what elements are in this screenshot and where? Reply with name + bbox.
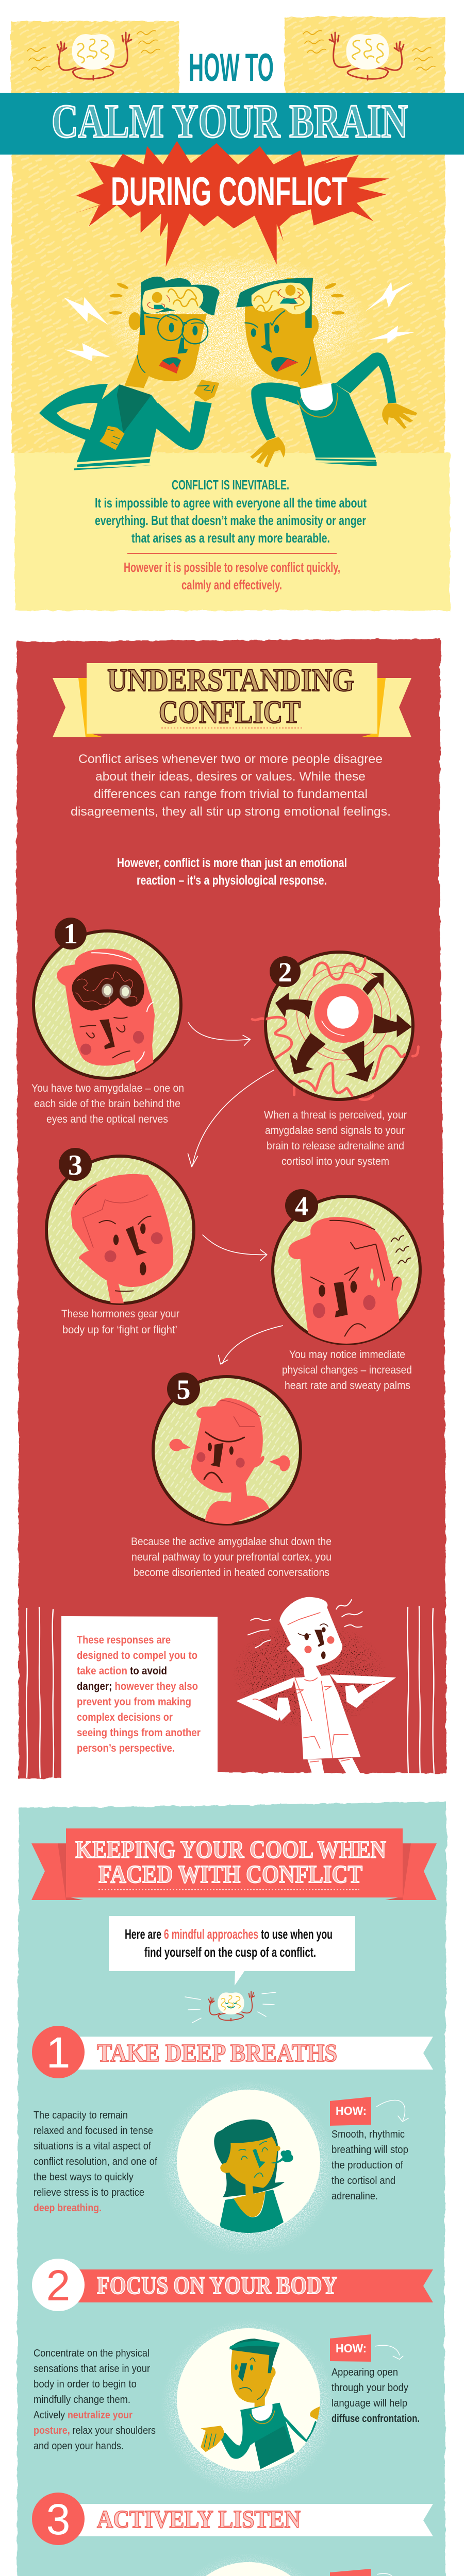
banner: ACTIVELY LISTEN [97, 2505, 301, 2533]
text: physiological response: reaction – it’s a physiological response. [137, 873, 327, 888]
decorative wavy curtain lines [26, 1606, 434, 1777]
text: step 1 left: conflict resolution, and one of [34, 2156, 157, 2167]
text: step 1 how [332, 2128, 408, 2202]
text: resolve conflict quickly [124, 560, 340, 592]
title: how to: HOW TO [189, 46, 274, 90]
text: conflict arises: differences can range from trivial to fundamental [94, 787, 368, 801]
text: step 1 caption: You have two amygdalae – one on [31, 1082, 184, 1094]
illustration: man with open posture [177, 2328, 321, 2471]
callout: these responses: These responses are [77, 1634, 171, 1646]
text: step 2 how: diffuse confrontation. [332, 2413, 420, 2425]
text: step 1 left: the best ways to quickly [34, 2171, 134, 2183]
text: physiological response [117, 856, 347, 888]
text: resolve conflict quickly: However it is possible to resolve conflict quickly, [124, 560, 340, 575]
text: step 5 caption: become disoriented in heated conversations [134, 1567, 329, 1579]
how label with arrow: HOW: [336, 2104, 367, 2117]
text: step 2 caption: cortisol into your system [281, 1156, 389, 1167]
panel: main yellow background [12, 154, 445, 453]
text: step 4 caption: physical changes – increased [282, 1364, 412, 1376]
callout: these responses: prevent you from making [77, 1696, 191, 1708]
starburst [74, 141, 389, 267]
banner: FOCUS ON YOUR BODY [97, 2271, 337, 2299]
panel: understanding conflict [16, 639, 446, 1784]
panel: keeping your cool [15, 1802, 454, 2576]
step 5: steaming head [153, 1372, 301, 1525]
icon: meditating brain left [27, 31, 160, 80]
callout: these responses: complex decisions or [77, 1711, 173, 1723]
icon: small smiling brain [185, 1991, 276, 2023]
callout: these responses: take action to avoid [77, 1665, 167, 1677]
callout: six mindful approaches: find yourself on the cusp of a conflict. [144, 1944, 316, 1960]
step 4: physical changes head: 4 [295, 1192, 308, 1221]
how label with arrow [330, 2097, 408, 2126]
title band [0, 93, 464, 155]
ribbon: keeping your cool: FACED WITH CONFLICT [98, 1860, 362, 1888]
text: step 2 caption: brain to release adrenaline and [267, 1140, 404, 1152]
icon: alarm droplets [109, 282, 344, 315]
text: step 2 how: through your body [332, 2382, 409, 2394]
step 2: amygdalae signal [252, 952, 418, 1100]
callout: these responses: person’s perspective. [77, 1742, 175, 1754]
text: conflict is inevitable: everything. But that doesn’t make the animosity or anger [95, 513, 366, 528]
text: step 1 caption [31, 1082, 184, 1125]
text: step 1 left [34, 2109, 157, 2214]
text: step 1 how: adrenaline. [332, 2190, 378, 2202]
banner: 3 [46, 2495, 70, 2544]
arrow: step 3 to 4 [203, 1235, 267, 1261]
text: step 2 left: posture, relax your shoulders [34, 2425, 156, 2436]
text: step 3 caption [61, 1308, 179, 1336]
callout: these responses: seeing things from another [77, 1727, 201, 1739]
arrow: step 4 to 5 [219, 1326, 283, 1364]
illustration: woman breathing [177, 2090, 320, 2233]
text: step 1 how: the cortisol and [332, 2175, 395, 2187]
text: step 2 left: body in order to begin to [34, 2378, 137, 2390]
icon: lightning bolts [64, 282, 415, 361]
step 1: head with brain [34, 918, 181, 1078]
callout: these responses: designed to compel you to [77, 1650, 197, 1662]
step 1: take deep breaths [32, 2026, 433, 2255]
text: step 1 left: deep breathing. [34, 2202, 102, 2214]
step 2: focus on your body [32, 2259, 433, 2471]
how label with arrow: HOW: [336, 2342, 367, 2355]
illustration: man listening with speech bubbles [206, 2562, 291, 2576]
text: conflict is inevitable: It is impossible to agree with everyone all the time about [95, 495, 367, 511]
ribbon: understanding conflict [53, 663, 411, 737]
divider rule [127, 553, 337, 554]
mint panel background [15, 1802, 454, 2576]
step 3: hormones head: 3 [68, 1149, 82, 1181]
banner [32, 2259, 433, 2311]
text: step 2 left: Concentrate on the physical [34, 2347, 150, 2359]
text: step 2 caption [264, 1109, 407, 1167]
speckle behind step illustrations [155, 2080, 336, 2576]
text: step 3 caption: These hormones gear your [61, 1308, 179, 1320]
text: step 1 left: relaxed and focused in tense [34, 2125, 153, 2137]
step 2: amygdalae signal: 2 [278, 957, 292, 988]
text: physiological response: However, conflict is more than just an emotional [117, 856, 347, 870]
text: step 2 left [34, 2347, 156, 2452]
text: step 5 caption: neural pathway to your prefrontal cortex, you [131, 1551, 332, 1563]
ribbon: keeping your cool: KEEPING YOUR COOL WHEN [75, 1835, 386, 1863]
panel background red [16, 639, 446, 1778]
banner: 1 [46, 2028, 70, 2077]
ribbon: understanding conflict: UNDERSTANDING [107, 663, 354, 698]
text: step 4 caption: You may notice immediate [289, 1349, 405, 1361]
text: conflict is inevitable [95, 477, 367, 546]
text: step 3 caption: body up for ‘fight or flight’ [62, 1324, 177, 1336]
illustration: two arguing men [39, 277, 418, 470]
arrow: step 1 to 2 [189, 1023, 250, 1045]
banner [32, 2026, 433, 2078]
text: step 5 caption: Because the active amygdalae shut down the [131, 1536, 332, 1548]
text: step 2 left: sensations that arise in your [34, 2363, 150, 2375]
text: step 1 how: the production of [332, 2159, 403, 2171]
text: step 1 how: breathing will stop [332, 2144, 408, 2156]
callout: these responses: danger; however they also [77, 1681, 198, 1692]
figure: stressed man in white [236, 1597, 396, 1774]
text: step 2 how: Appearing open [332, 2366, 398, 2378]
banner: 2 [46, 2261, 70, 2310]
text: conflict arises [71, 752, 391, 819]
callout: these responses [61, 1616, 218, 1784]
text: step 1 left: situations is a vital aspect of [34, 2140, 151, 2152]
dark speckle behind white figure [232, 1620, 387, 1728]
step 4: physical changes head [273, 1189, 420, 1349]
figure: right man [236, 278, 418, 467]
banner: TAKE DEEP BREATHS [97, 2039, 337, 2067]
panel: header section [0, 17, 464, 611]
text: step 4 caption [282, 1349, 412, 1392]
text: step 2 left: Actively neutralize your [34, 2409, 132, 2421]
how label with arrow [330, 2569, 400, 2576]
text: resolve conflict quickly: calmly and effectively. [181, 577, 282, 592]
step 3: hormones head [46, 1148, 194, 1305]
text: conflict arises: about their ideas, desires or values. While these [95, 770, 366, 784]
text: conflict arises: Conflict arises whenever two or more people disagree [78, 752, 383, 766]
text: step 2 how: language will help [332, 2397, 407, 2409]
step 5: steaming head: 5 [176, 1374, 191, 1405]
step 3: actively listen [32, 2493, 433, 2576]
ribbon: understanding conflict: CONFLICT [159, 695, 301, 730]
text: step 1 caption: each side of the brain behind the [34, 1098, 180, 1110]
icon: meditating brain right [303, 31, 435, 80]
banner [32, 2493, 433, 2545]
text: step 2 left: and open your hands. [34, 2440, 124, 2452]
figure: left man [39, 277, 220, 470]
text: step 2 how [332, 2366, 420, 2425]
arrow: step 2 to 3 [188, 1070, 274, 1167]
how label with arrow [330, 2334, 403, 2362]
step 1: head with brain: 1 [63, 918, 78, 950]
ribbon: keeping your cool [31, 1828, 437, 1900]
text: step 1 how: Smooth, rhythmic [332, 2128, 405, 2140]
callout: six mindful approaches [109, 1916, 355, 1986]
panel: pale yellow lower panel [15, 453, 450, 611]
callout: six mindful approaches: Here are 6 mindful approaches to use when you [125, 1926, 333, 1942]
text: step 2 caption: When a threat is perceived, your [264, 1109, 407, 1121]
text: step 1 left: relieve stress is to practice [34, 2187, 144, 2198]
text: step 1 caption: eyes and the optical nerves [46, 1113, 168, 1125]
text: step 5 caption [131, 1536, 332, 1579]
text: step 2 caption: amygdalae send signals to your [265, 1125, 405, 1137]
panel: top right yellow block [285, 17, 445, 93]
text: conflict is inevitable: that arises as a result any more bearable. [131, 530, 330, 546]
text: step 4 caption: heart rate and sweaty palms [285, 1380, 410, 1392]
text: step 1 left: The capacity to remain [34, 2109, 128, 2121]
text: conflict is inevitable: CONFLICT IS INEVITABLE. [172, 477, 289, 493]
speckle behind the heads [104, 255, 370, 389]
text: conflict arises: disagreements, they all stir up strong emotional feelings. [71, 805, 391, 819]
text: step 2 left: mindfully change them. [34, 2394, 130, 2405]
panel: top left yellow block [11, 21, 179, 93]
